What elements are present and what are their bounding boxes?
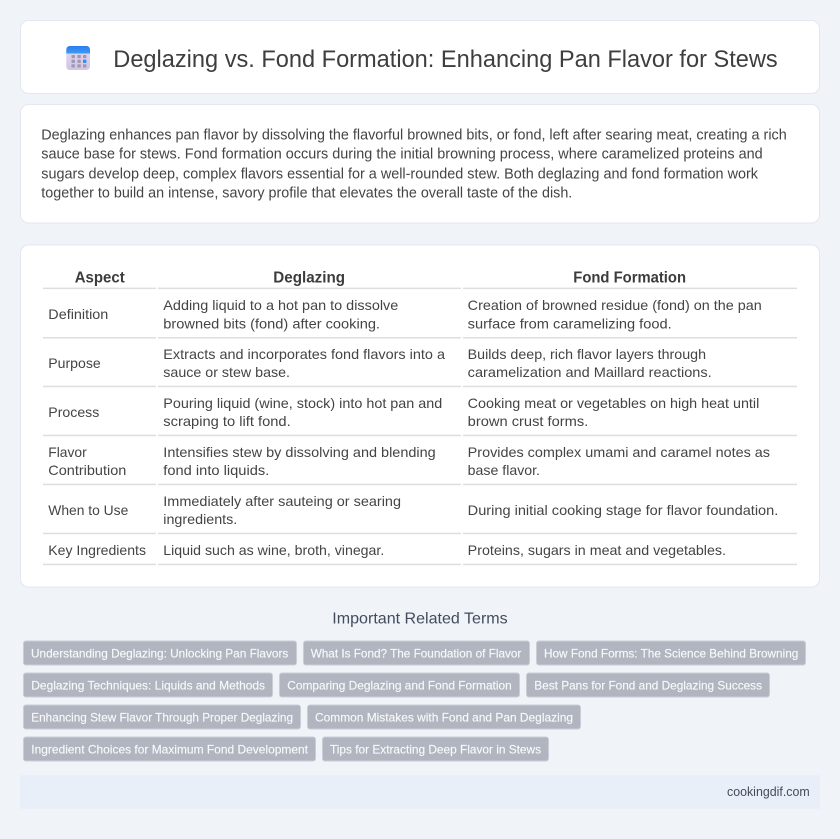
tag: Best Pans for Fond and Deglazing Success [534,678,762,692]
tag [280,673,520,697]
table header row: Deglazing [273,270,345,287]
row: when to use: Immediately after sauteing or searing [163,493,401,509]
intro paragraph [41,127,787,201]
table header row [75,270,686,287]
row: definition: Definition [48,306,108,322]
related terms tags [24,641,806,761]
tag: Tips for Extracting Deep Flavor in Stews [330,742,541,756]
intro paragraph: Deglazing enhances pan flavor by dissolving the flavorful browned bits, or fond, left after searing meat, creating a rich [41,127,787,143]
tag [24,673,272,697]
tag [24,705,300,729]
tag [308,705,580,729]
row: flavor contribution: Intensifies stew by dissolving and blending [163,444,436,460]
tag [24,737,316,761]
tag: Deglazing Techniques: Liquids and Methods [31,678,265,692]
tag: Understanding Deglazing: Unlocking Pan Flavors [31,646,288,660]
tag [304,641,530,665]
row: purpose: caramelization and Maillard reactions. [468,364,712,380]
row: flavor contribution: Contribution [48,462,126,478]
row: process [48,395,759,429]
row: purpose: sauce or stew base. [163,364,290,380]
tag [526,673,770,697]
row: flavor contribution: fond into liquids. [163,462,269,478]
row: when to use: During initial cooking stage for flavor foundation. [468,502,778,518]
row: purpose: Purpose [48,355,101,371]
tag [24,641,296,665]
footer [20,775,820,809]
tag: Common Mistakes with Fond and Pan Deglazing [315,710,573,724]
row: when to use: ingredients. [163,511,237,527]
row: definition: browned bits (fond) after cooking. [163,315,380,331]
panel: comparison table [20,245,820,587]
table header row: Fond Formation [573,270,686,287]
tag [536,641,806,665]
row: purpose: Extracts and incorporates fond flavors into a [163,346,445,362]
tag: What Is Fond? The Foundation of Flavor [311,646,521,660]
tag [322,737,548,761]
row: process: brown crust forms. [468,413,588,429]
row: when to use: When to Use [48,502,128,518]
row: process: Cooking meat or vegetables on high heat until [468,395,759,411]
row: flavor contribution: Provides complex umami and caramel notes as [468,444,770,460]
row: process: Process [48,404,99,420]
tag: Enhancing Stew Flavor Through Proper Deglazing [31,710,293,724]
row: purpose: Builds deep, rich flavor layers through [468,346,706,362]
row: definition: Adding liquid to a hot pan to dissolve [163,297,399,313]
tag: Ingredient Choices for Maximum Fond Development [31,742,309,756]
header panel [20,20,820,94]
table header row: Aspect [75,270,125,287]
row: process: Pouring liquid (wine, stock) into hot pan and [163,395,442,411]
row: process: scraping to lift fond. [163,413,291,429]
row: definition: surface from caramelizing food. [468,315,672,331]
row: definition: Creation of browned residue (fond) on the pan [468,297,762,313]
panel: introduction [20,104,820,223]
icon: calendar [66,46,90,70]
row: when to use [48,493,778,527]
row: flavor contribution: Flavor [48,444,87,460]
intro paragraph: together to build an intense, savory profile that elevates the overall taste of the dish. [41,185,572,201]
title: Deglazing vs. Fond Formation: Enhancing Pan Flavor for Stews [113,46,778,73]
row: purpose [48,346,712,380]
row: key ingredients: Liquid such as wine, broth, vinegar. [163,542,384,558]
intro paragraph: sauce base for stews. Fond formation occurs during the initial browning process, where caramelized proteins and [41,146,763,162]
row: definition [48,297,762,331]
heading: important related terms: Important Related Terms [332,610,508,627]
row: key ingredients [48,542,726,558]
row: key ingredients: Proteins, sugars in meat and vegetables. [468,542,726,558]
footer source text: cookingdif.com [727,784,810,799]
intro paragraph: sugars develop deep, complex flavors essential for a well-rounded stew. Both deglazing and fond formation work [41,166,759,182]
row: flavor contribution [48,444,770,478]
row: key ingredients: Key Ingredients [48,542,146,558]
tag: How Fond Forms: The Science Behind Browning [544,646,798,660]
row: flavor contribution: base flavor. [468,462,540,478]
tag: Comparing Deglazing and Fond Formation [287,678,512,692]
